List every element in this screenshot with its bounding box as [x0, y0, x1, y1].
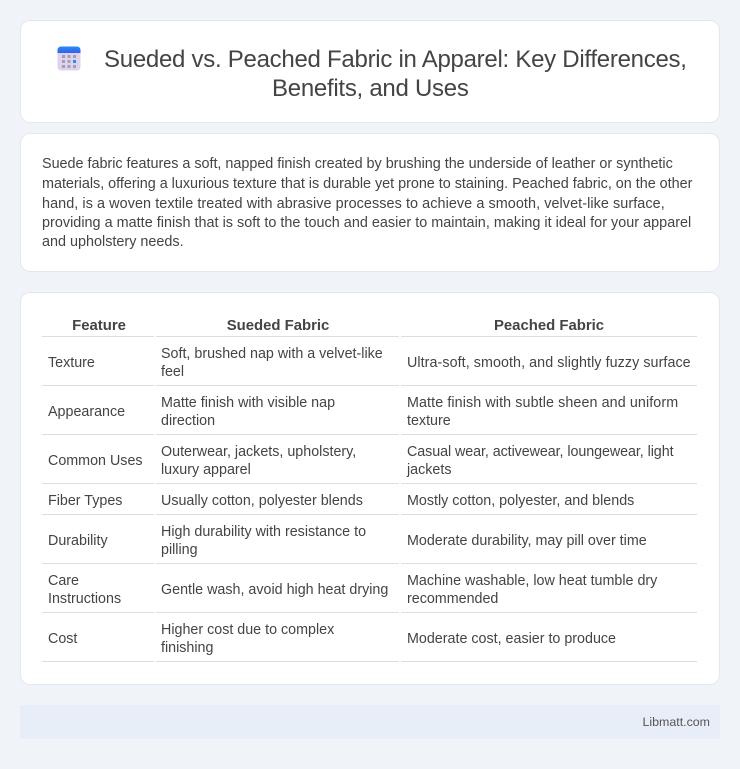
- comparison table: [42, 318, 697, 662]
- row: appearance: Matte finish with subtle sheen and uniform: [407, 395, 678, 411]
- table header: Feature: [72, 318, 126, 334]
- row: cost: [48, 622, 616, 656]
- row: appearance: Appearance: [48, 404, 125, 420]
- row: durability: High durability with resistance to: [161, 524, 366, 540]
- row: common uses: luxury apparel: [161, 462, 251, 478]
- table header: [72, 318, 604, 334]
- row: care instructions: [48, 573, 658, 607]
- row: care instructions: recommended: [407, 591, 498, 607]
- row: texture: [48, 346, 691, 380]
- text block: intro: hand, is a woven textile treated with abrasive processes to achieve a smooth, velvet-like surface,: [42, 196, 665, 212]
- row: appearance: [48, 395, 678, 429]
- row: cost: Cost: [48, 631, 77, 647]
- footer bar: [20, 705, 720, 739]
- text block: intro: [42, 156, 692, 250]
- row: fiber types: [48, 493, 634, 509]
- row: common uses: Outerwear, jackets, upholstery,: [161, 444, 356, 460]
- row: texture: Ultra-soft, smooth, and slightly fuzzy surface: [407, 355, 691, 371]
- title: [104, 46, 687, 102]
- row: common uses: [48, 444, 674, 478]
- text block: intro: providing a matte finish that is soft to the touch and easier to maintain, making it ideal for your apparel: [42, 215, 691, 231]
- row: fiber types: Usually cotton, polyester blends: [161, 493, 363, 509]
- row: durability: pilling: [161, 542, 198, 558]
- row: appearance: Matte finish with visible nap: [161, 395, 335, 411]
- icon: calendar: [58, 46, 80, 70]
- row: care instructions: Machine washable, low heat tumble dry: [407, 573, 657, 589]
- row: fiber types: Fiber Types: [48, 493, 122, 509]
- title: Benefits, and Uses: [272, 75, 469, 102]
- row: appearance: texture: [407, 413, 451, 429]
- row: durability: Moderate durability, may pill over time: [407, 533, 647, 549]
- row: durability: [48, 524, 647, 558]
- row: durability: Durability: [48, 533, 108, 549]
- row: cost: Moderate cost, easier to produce: [407, 631, 616, 647]
- row: care instructions: Gentle wash, avoid high heat drying: [161, 582, 388, 598]
- title: Sueded vs. Peached Fabric in Apparel: Key Differences,: [104, 46, 687, 73]
- panel: title card: [20, 20, 720, 123]
- row: fiber types: Mostly cotton, polyester, and blends: [407, 493, 634, 509]
- footer credit: Libmatt.com: [643, 715, 710, 729]
- table header: Sueded Fabric: [227, 318, 329, 334]
- row: texture: feel: [161, 364, 184, 380]
- row: appearance: direction: [161, 413, 215, 429]
- text block: intro: and upholstery needs.: [42, 234, 184, 250]
- row: care instructions: Instructions: [48, 591, 121, 607]
- row: care instructions: Care: [48, 573, 79, 589]
- row: cost: Higher cost due to complex: [161, 622, 334, 638]
- text block: intro: materials, offering a luxurious texture that is durable yet prone to staining. Peached fabric, on the other: [42, 176, 692, 192]
- row: common uses: jackets: [407, 462, 452, 478]
- table header: Peached Fabric: [494, 318, 604, 334]
- panel: intro card: [20, 133, 720, 272]
- text block: intro: Suede fabric features a soft, napped finish created by brushing the underside of leather or synthetic: [42, 156, 673, 172]
- row: common uses: Casual wear, activewear, loungewear, light: [407, 444, 673, 460]
- row: texture: Texture: [48, 355, 95, 371]
- row: common uses: Common Uses: [48, 453, 143, 469]
- row: cost: finishing: [161, 640, 213, 656]
- panel: comparison table card: [20, 292, 720, 685]
- row: texture: Soft, brushed nap with a velvet-like: [161, 346, 383, 362]
